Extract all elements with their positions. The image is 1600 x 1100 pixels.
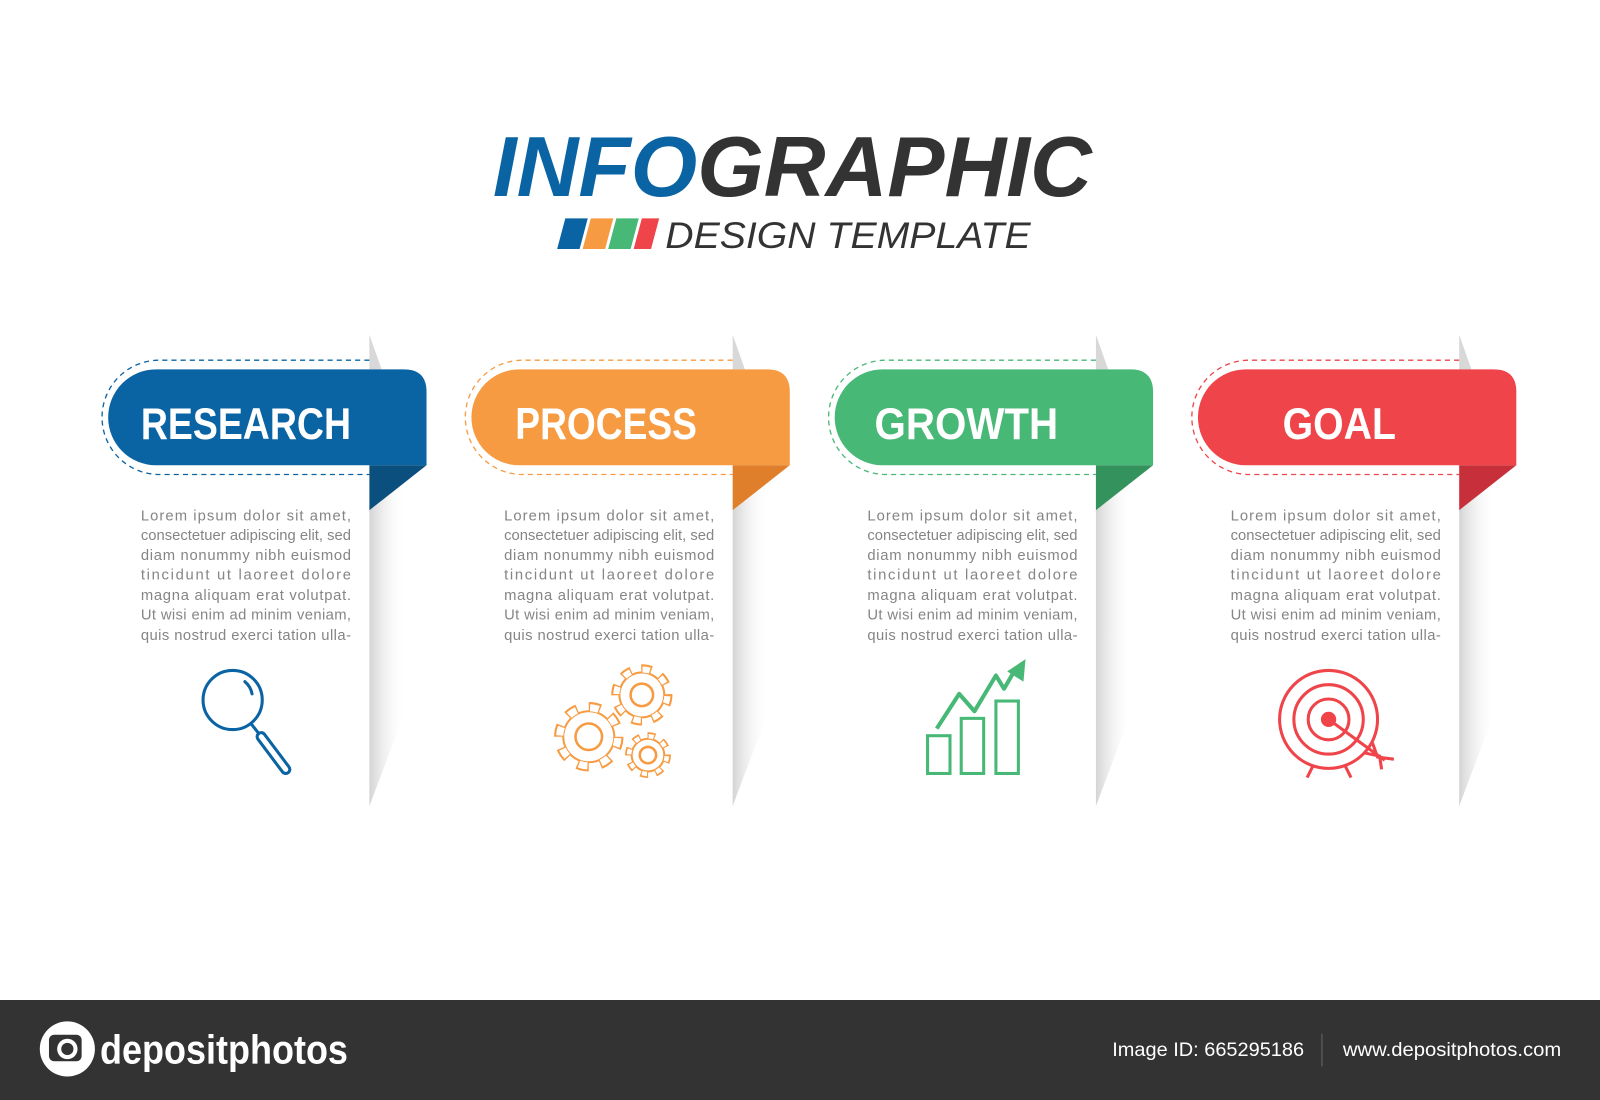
text block: growth: tincidunt ut laoreet dolore (867, 568, 1078, 584)
tab: goal (1198, 369, 1516, 465)
logo: camera icon (40, 1021, 95, 1077)
panel: growth (829, 335, 1153, 806)
text block: growth: magna aliquam erat volutpat. (867, 588, 1078, 604)
text block: growth (867, 508, 1078, 644)
heading: research: RESEARCH (141, 398, 351, 449)
icon: growth chart (928, 659, 1026, 773)
text block: growth: consectetuer adipiscing elit, sed (867, 528, 1078, 544)
heading: growth: GROWTH (874, 398, 1058, 449)
text block: growth: Lorem ipsum dolor sit amet, (867, 508, 1078, 524)
footer (0, 1000, 1600, 1100)
text block: goal: consectetuer adipiscing elit, sed (1231, 528, 1441, 544)
heading: goal: GOAL (1283, 398, 1396, 449)
text block: goal: diam nonummy nibh euismod (1231, 548, 1441, 564)
text block: research: quis nostrud exerci tation ulla- (141, 628, 351, 644)
text block: goal: tincidunt ut laoreet dolore (1231, 568, 1441, 584)
title: INFOGRAPHIC: INFOGRAPHIC (493, 119, 1093, 215)
text block: process: quis nostrud exerci tation ulla- (504, 628, 714, 644)
text block: process: diam nonummy nibh euismod (504, 548, 714, 564)
icon: gears (559, 668, 668, 775)
text block: research: magna aliquam erat volutpat. (141, 588, 351, 604)
panel: research (102, 335, 427, 806)
text block: research: diam nonummy nibh euismod (141, 548, 351, 564)
text block: growth: quis nostrud exerci tation ulla- (867, 628, 1078, 644)
logo text: depositphotos (100, 1026, 348, 1072)
icon: magnifier (203, 670, 286, 769)
text block: goal: magna aliquam erat volutpat. (1231, 588, 1441, 604)
color slashes (557, 218, 659, 249)
text block: process: magna aliquam erat volutpat. (504, 588, 714, 604)
image id: Image ID: 665295186 (1112, 1039, 1304, 1061)
website: www.depositphotos.com (1342, 1039, 1561, 1061)
panel: goal (1192, 335, 1516, 806)
text block: goal: Lorem ipsum dolor sit amet, (1231, 508, 1441, 524)
text block: process: Lorem ipsum dolor sit amet, (504, 508, 714, 524)
text block: research: Lorem ipsum dolor sit amet, (141, 508, 351, 524)
text block: goal: Ut wisi enim ad minim veniam, (1231, 607, 1441, 623)
icon: target (1280, 670, 1394, 778)
heading: process: PROCESS (515, 398, 697, 449)
text block: research (141, 508, 351, 644)
text block: growth: diam nonummy nibh euismod (867, 548, 1078, 564)
text block: process: Ut wisi enim ad minim veniam, (504, 607, 714, 623)
text block: goal: quis nostrud exerci tation ulla- (1231, 628, 1441, 644)
text block: research: tincidunt ut laoreet dolore (141, 568, 351, 584)
text block: process (504, 508, 714, 644)
subtitle text: DESIGN TEMPLATE (665, 215, 1031, 256)
subtitle (557, 215, 1031, 256)
text block: growth: Ut wisi enim ad minim veniam, (867, 607, 1078, 623)
text block: goal (1231, 508, 1441, 644)
tab: process (471, 369, 790, 465)
text block: research: consectetuer adipiscing elit, sed (141, 528, 351, 544)
text block: process: tincidunt ut laoreet dolore (504, 568, 714, 584)
tab: research (108, 369, 427, 465)
tab: growth (835, 369, 1153, 465)
text block: research: Ut wisi enim ad minim veniam, (141, 607, 351, 623)
panel: process (465, 335, 790, 806)
text block: process: consectetuer adipiscing elit, sed (504, 528, 714, 544)
